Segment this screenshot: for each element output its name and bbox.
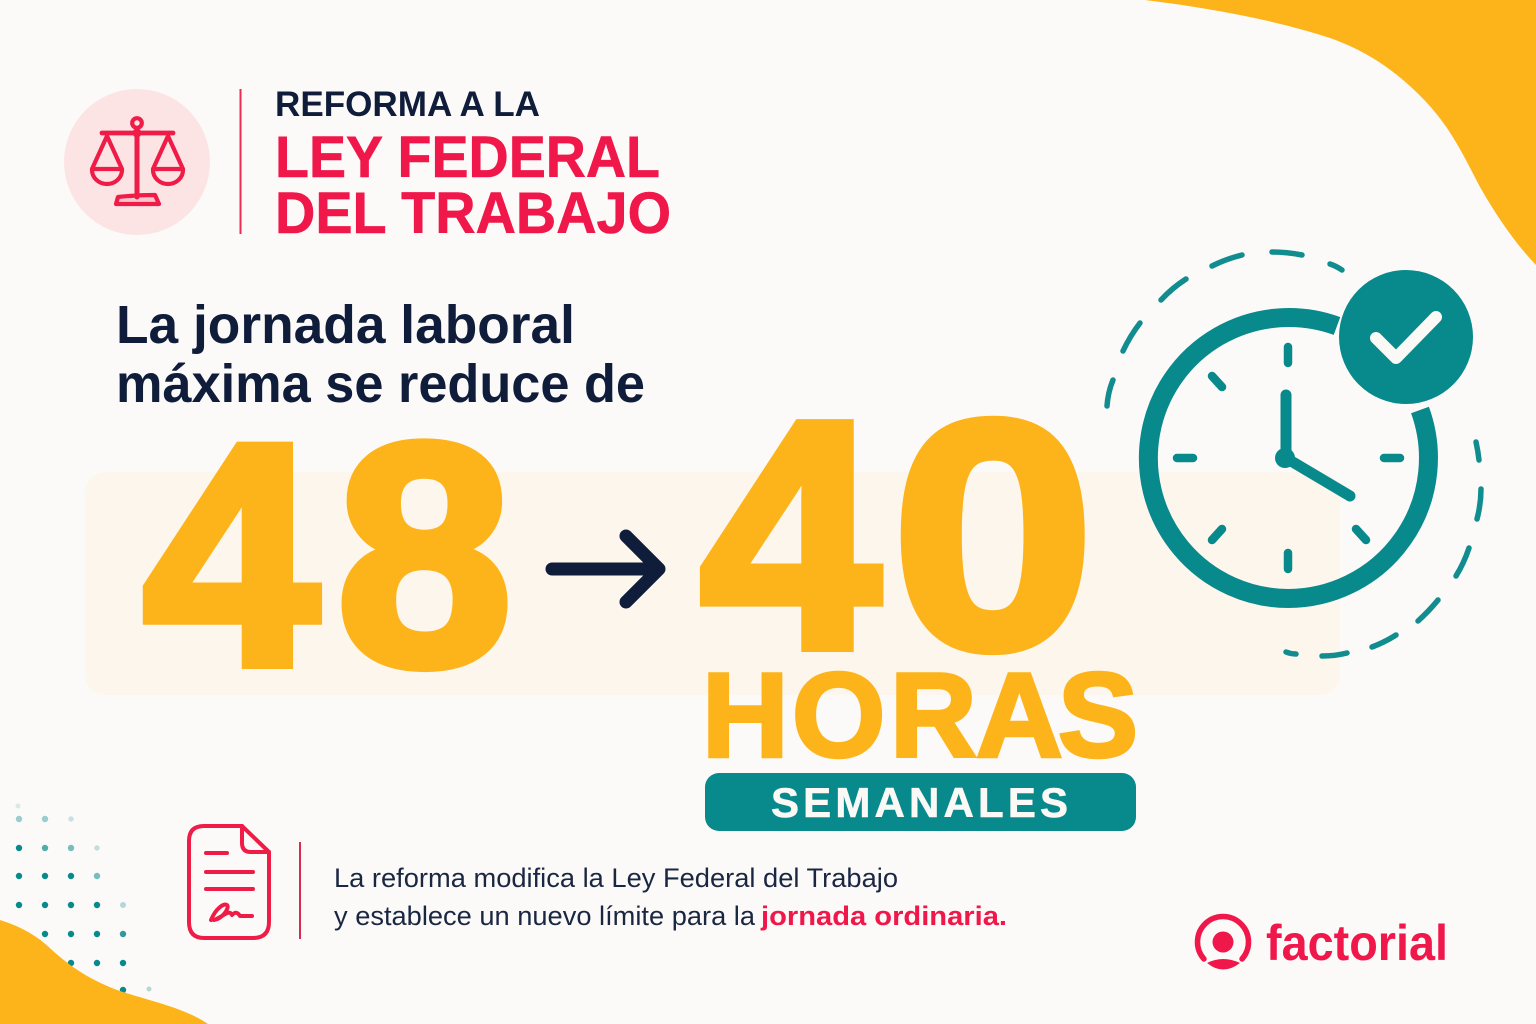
clock ticks: [1177, 347, 1400, 569]
title: DEL TRABAJO: [275, 181, 671, 246]
title: REFORMA A LA: [275, 85, 540, 124]
description text: jornada ordinaria.: [760, 901, 1007, 931]
number 48: 4: [143, 378, 321, 731]
title: LEY FEDERAL: [275, 125, 660, 190]
number 40: 4: [700, 354, 882, 716]
clock ring: [1148, 318, 1428, 598]
number 40: [700, 354, 1094, 716]
logo wordmark: factorial: [1266, 915, 1448, 971]
icon: clock with check: [1107, 252, 1481, 656]
logo symbol: [1197, 916, 1249, 970]
top right yellow blob: [1145, 0, 1536, 265]
dot pattern: [16, 804, 152, 993]
dashed orbit: [1107, 252, 1481, 656]
number 48: 8: [336, 378, 512, 731]
description text: y establece un nuevo límite para la: [334, 901, 756, 931]
check badge: [1339, 270, 1473, 404]
description text: La reforma modifica la Ley Federal del Trabajo: [334, 863, 898, 893]
subtitle: máxima se reduce de: [116, 354, 645, 414]
header divider: [240, 89, 242, 234]
highlight band behind numbers: [85, 472, 1340, 695]
description text: [334, 863, 1007, 931]
factorial logo: [1197, 915, 1448, 971]
semanales pill: [705, 773, 1136, 831]
bottom left yellow blob: [0, 920, 208, 1024]
number 40: 0: [892, 354, 1094, 716]
icon: scales of justice: [64, 89, 210, 235]
horas label: HORAS: [702, 648, 1138, 782]
number 48: [143, 378, 512, 731]
footer divider: [299, 842, 301, 939]
clock centre: [1275, 448, 1295, 468]
icon: signed document: [189, 826, 269, 938]
arrow: [552, 536, 659, 602]
subtitle: [116, 295, 645, 414]
clock hands: [1286, 395, 1350, 496]
header: [64, 85, 671, 246]
subtitle: La jornada laboral: [116, 295, 575, 355]
title: [275, 85, 671, 246]
semanales pill: SEMANALES: [771, 779, 1068, 826]
